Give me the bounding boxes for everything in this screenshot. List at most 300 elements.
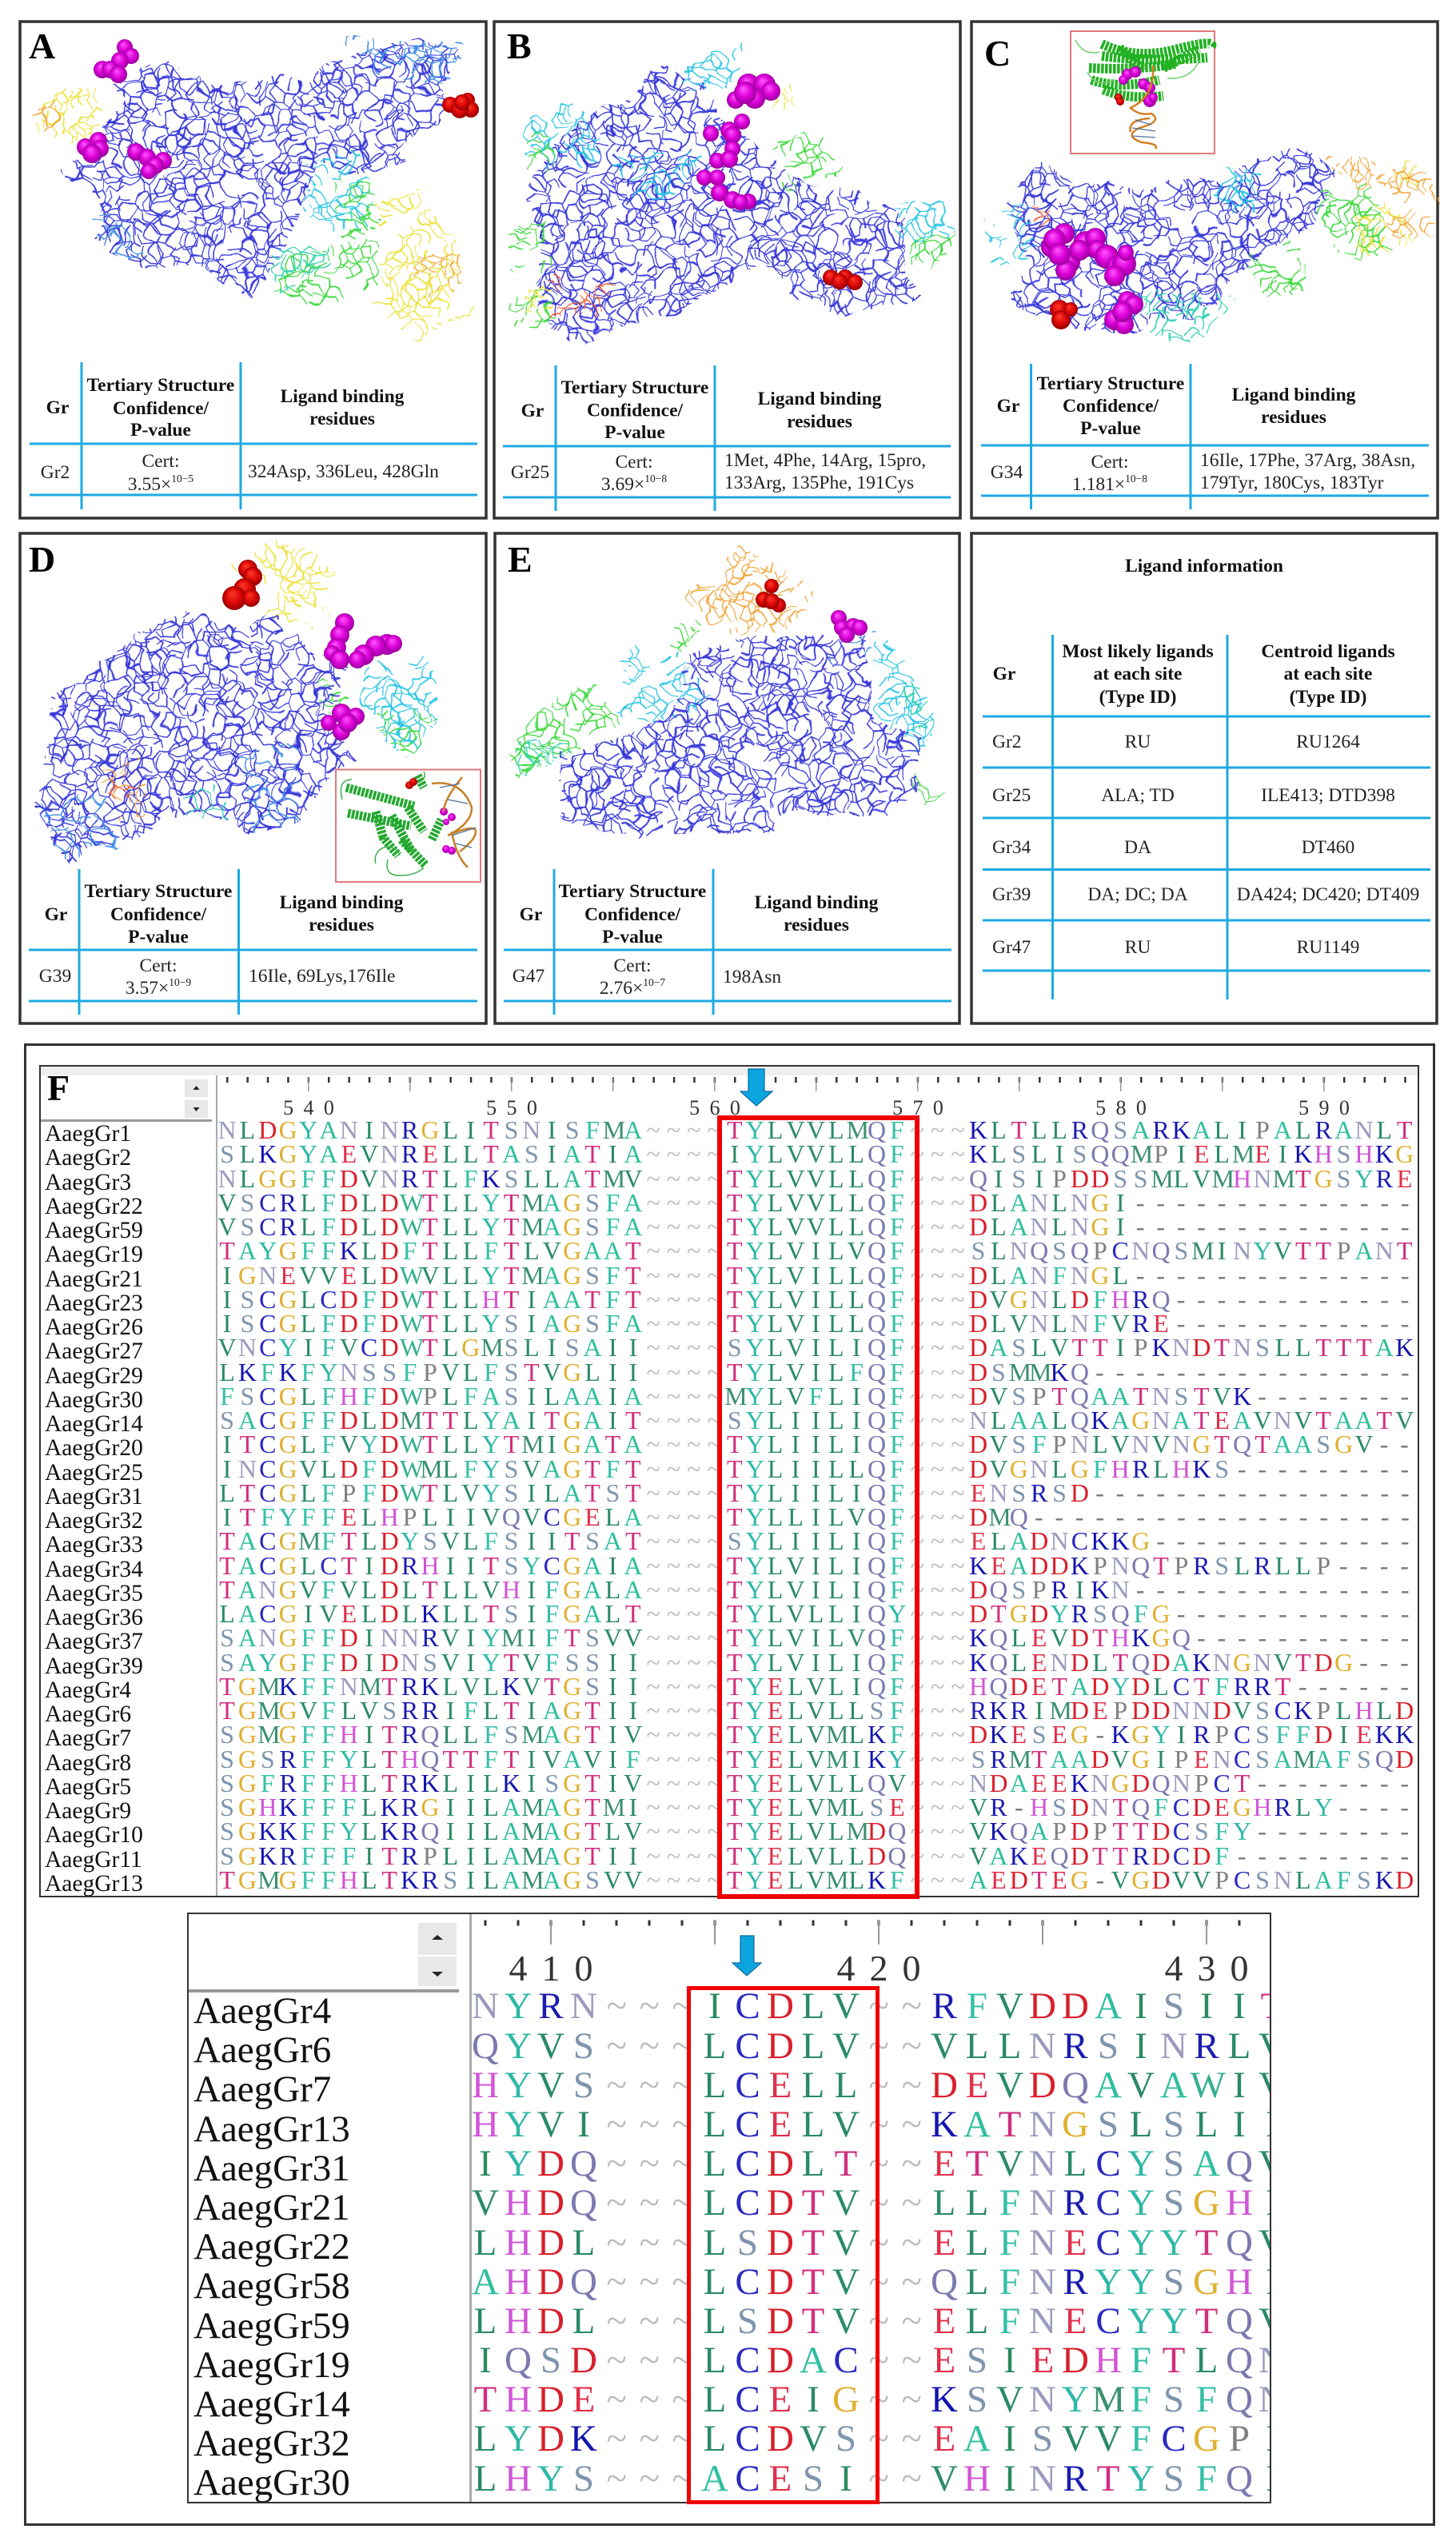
aligned residues: E: [341, 1260, 357, 1289]
aligned residues: ~~~: [911, 1430, 971, 1458]
aligned residues: L: [788, 1696, 804, 1725]
aligned residues: F: [321, 1865, 336, 1894]
aligned residues: D: [969, 1382, 987, 1410]
aligned residues: L: [301, 1382, 316, 1410]
aligned residues: S: [220, 1720, 234, 1749]
sequence names: AaegGr27: [45, 1338, 143, 1364]
aligned residues: I: [852, 1333, 860, 1362]
ligand information table: RU: [1125, 937, 1151, 958]
aligned residues: Q: [1131, 1551, 1150, 1580]
aligned residues: V: [1111, 1309, 1130, 1338]
ligand information table: DT460: [1302, 837, 1354, 858]
aligned residues: V: [1051, 1333, 1069, 1362]
aligned residues: C: [1095, 2182, 1121, 2224]
aligned residues: ~~~: [911, 1260, 971, 1289]
sequence names: AaegGr14: [193, 2383, 350, 2425]
aligned residues: N: [1029, 2104, 1056, 2145]
aligned residues: N: [1172, 1333, 1191, 1362]
ligand information table: Gr2: [992, 732, 1022, 752]
aligned residues: ~~~~: [646, 1696, 728, 1725]
aligned residues: L: [966, 2222, 988, 2264]
aligned residues: F: [321, 1672, 336, 1701]
aligned residues: V: [1354, 1430, 1373, 1458]
aligned residues: ~~~~: [646, 1285, 728, 1314]
aligned residues: Q: [868, 1454, 886, 1482]
aligned residues: G: [238, 1720, 257, 1749]
aligned residues: A: [624, 1502, 642, 1531]
aligned residues: T: [727, 1430, 743, 1458]
aligned residues: T: [544, 1672, 560, 1701]
aligned residues: A: [604, 1526, 622, 1555]
aligned residues: H: [1226, 2182, 1253, 2224]
red highlight box: motif 2: [687, 1986, 880, 2504]
aligned residues: H: [969, 1672, 987, 1701]
panel F label: F: [47, 1067, 70, 1108]
aligned residues: [472, 1987, 1270, 2499]
aligned residues: ~~~: [606, 2379, 705, 2420]
aligned residues: V: [537, 2064, 564, 2106]
aligned residues: L: [240, 1164, 255, 1193]
aligned residues: N: [1151, 1382, 1171, 1410]
aligned residues: D: [381, 1647, 399, 1676]
aligned residues: N: [1192, 1696, 1211, 1725]
aligned residues: K: [421, 1672, 439, 1701]
aligned residues: P: [1255, 1115, 1270, 1144]
aligned residues: G: [563, 1551, 581, 1580]
aligned residues: W: [400, 1285, 424, 1314]
aligned residues: C: [259, 1430, 276, 1458]
aligned residues: --------------: [1136, 1212, 1419, 1241]
aligned residues: E: [1194, 1745, 1210, 1773]
aligned residues: -: [1015, 1793, 1023, 1821]
panel B table: Confidence/: [587, 400, 684, 421]
panel C table: Cert:: [1091, 452, 1129, 473]
aligned residues: S: [606, 1478, 620, 1507]
aligned residues: V: [461, 1672, 480, 1701]
aligned residues: G: [1071, 1865, 1089, 1894]
panel A table: Gr2: [41, 462, 70, 483]
aligned residues: V: [807, 1188, 825, 1217]
aligned residues: I: [223, 1285, 231, 1314]
ligand information table: (Type ID): [1290, 687, 1366, 708]
aligned residues: T: [1112, 1647, 1128, 1676]
aligned residues: T: [422, 1309, 438, 1338]
panel D table: Ligand binding: [280, 892, 404, 913]
aligned residues: H: [381, 1502, 399, 1531]
aligned residues: ~~~: [606, 2104, 705, 2145]
aligned residues: I: [628, 1647, 637, 1676]
aligned residues: Q: [1091, 1115, 1109, 1144]
sequence names: AaegGr11: [45, 1847, 142, 1873]
aligned residues: V: [522, 1672, 541, 1701]
aligned residues: Q: [1226, 2458, 1253, 2499]
aligned residues: P: [1174, 1551, 1188, 1580]
aligned residues: M: [826, 1865, 849, 1894]
aligned residues: K: [482, 1164, 501, 1193]
aligned residues: D: [1030, 1551, 1048, 1580]
inset: ribbon structure D: [336, 769, 481, 882]
aligned residues: K: [279, 1358, 297, 1386]
aligned residues: I: [304, 1333, 313, 1362]
panel C table: G34: [991, 462, 1023, 483]
aligned residues: E: [1214, 1793, 1230, 1821]
aligned residues: L: [848, 1139, 864, 1168]
aligned residues: R: [401, 1115, 418, 1144]
aligned residues: D: [1151, 1841, 1171, 1869]
aligned residues: C: [1095, 2143, 1121, 2184]
aligned residues: T: [1112, 1817, 1128, 1845]
aligned residues: C: [735, 2261, 760, 2303]
aligned residues: I: [608, 1769, 617, 1797]
aligned residues: I: [852, 1478, 860, 1507]
aligned residues: I: [1116, 1188, 1125, 1217]
aligned residues: D: [1071, 1623, 1089, 1652]
aligned residues: T: [219, 1236, 235, 1265]
aligned residues: V: [299, 1260, 317, 1289]
aligned residues: D: [381, 1478, 399, 1507]
aligned residues: K: [381, 1817, 399, 1845]
aligned residues: M: [1211, 1164, 1235, 1193]
aligned residues: F: [890, 1382, 904, 1410]
aligned residues: ~~: [868, 2458, 935, 2499]
ruler and scroll buttons: 540: [283, 1096, 334, 1119]
aligned residues: W: [400, 1382, 424, 1410]
aligned residues: E: [769, 2379, 792, 2420]
aligned residues: D: [1192, 1841, 1211, 1869]
aligned residues: I: [628, 1793, 637, 1821]
aligned residues: A: [583, 1575, 602, 1604]
aligned residues: E: [768, 1745, 783, 1773]
aligned residues: L: [402, 1599, 417, 1628]
aligned residues: ~~~: [911, 1623, 971, 1652]
ligand information table: RU: [1125, 732, 1151, 752]
aligned residues: L: [828, 1382, 844, 1410]
aligned residues: ~~~: [606, 2300, 705, 2342]
aligned residues: F: [890, 1358, 904, 1386]
aligned residues: A: [1160, 2064, 1187, 2106]
aligned residues: F: [484, 1236, 498, 1265]
aligned residues: V: [360, 1696, 378, 1725]
magenta ligand spheres: [696, 74, 780, 210]
aligned residues: I: [466, 1623, 475, 1652]
aligned residues: N: [401, 1647, 419, 1676]
aligned residues: F: [890, 1502, 904, 1531]
aligned residues: Y: [401, 1526, 419, 1555]
aligned residues: V: [807, 1164, 825, 1193]
aligned residues: L: [463, 1720, 478, 1749]
aligned residues: G: [1111, 1769, 1130, 1797]
aligned residues: S: [1093, 1599, 1107, 1628]
aligned residues: ~~~: [911, 1865, 971, 1894]
aligned residues: A: [563, 1478, 581, 1507]
aligned residues: S: [1134, 1164, 1148, 1193]
aligned residues: M: [826, 1720, 849, 1749]
aligned residues: I: [812, 1502, 820, 1531]
aligned residues: T: [1011, 1115, 1027, 1144]
aligned residues: D: [767, 2222, 794, 2264]
aligned residues: L: [966, 2182, 988, 2224]
aligned residues: L: [828, 1599, 844, 1628]
aligned residues: L: [991, 1139, 1007, 1168]
aligned residues: C: [259, 1285, 276, 1314]
aligned residues: E: [769, 2458, 792, 2499]
aligned residues: L: [828, 1260, 844, 1289]
aligned residues: I: [223, 1430, 231, 1458]
aligned residues: T: [219, 1575, 235, 1604]
aligned residues: Y: [1111, 1672, 1130, 1701]
aligned residues: L: [341, 1696, 357, 1725]
aligned residues: V: [996, 2064, 1023, 2106]
aligned residues: R: [401, 1817, 418, 1845]
sequence names: AaegGr36: [45, 1605, 143, 1630]
panel B table: residues: [787, 411, 852, 432]
aligned residues: E: [768, 1672, 783, 1701]
aligned residues: D: [258, 1115, 277, 1144]
aligned residues: D: [767, 2182, 794, 2224]
aligned residues: Y: [746, 1406, 764, 1434]
ligand information table: DA; DC; DA: [1087, 884, 1188, 905]
panel B table: 1Met, 4Phe, 14Arg, 15pro,: [724, 450, 926, 471]
aligned residues: I: [608, 1358, 617, 1386]
aligned residues: L: [828, 1454, 844, 1482]
aligned residues: L: [999, 2025, 1021, 2067]
panel A table: Gr: [46, 397, 69, 418]
aligned residues: P: [1229, 2418, 1250, 2459]
aligned residues: ~~: [868, 2182, 935, 2224]
panel C table: Confidence/: [1063, 396, 1159, 417]
panel D table: P-value: [128, 927, 189, 947]
aligned residues: T: [504, 1236, 519, 1265]
aligned residues: D: [340, 1164, 358, 1193]
aligned residues: Y: [1062, 2379, 1089, 2420]
aligned residues: L: [768, 1115, 783, 1144]
aligned residues: Y: [505, 2418, 532, 2459]
aligned residues: V: [807, 1865, 825, 1894]
aligned residues: F: [890, 1551, 904, 1580]
aligned residues: L: [828, 1623, 844, 1652]
aligned residues: D: [767, 2340, 794, 2381]
aligned residues: F: [1154, 1793, 1168, 1821]
aligned residues: E: [1255, 1139, 1271, 1168]
aligned residues: W: [400, 1309, 424, 1338]
aligned residues: D: [1071, 1841, 1089, 1869]
aligned residues: T: [219, 1526, 235, 1555]
aligned residues: D: [1091, 1745, 1109, 1773]
aligned residues: --------: [1258, 1382, 1419, 1410]
aligned residues: E: [933, 2143, 955, 2184]
aligned residues: I: [223, 1454, 231, 1482]
sequence names: AaegGr35: [45, 1581, 143, 1606]
aligned residues: I: [792, 1430, 800, 1458]
aligned residues: A: [543, 1696, 561, 1725]
aligned residues: T: [727, 1769, 743, 1797]
aligned residues: A: [1274, 1430, 1292, 1458]
aligned residues: N: [1172, 1430, 1191, 1458]
aligned residues: Y: [482, 1647, 501, 1676]
aligned residues: T: [381, 1865, 397, 1894]
aligned residues: D: [1151, 1696, 1171, 1725]
aligned residues: I: [466, 1115, 475, 1144]
aligned residues: ~~~~: [646, 1647, 728, 1676]
aligned residues: L: [991, 1406, 1007, 1434]
aligned residues: E: [971, 1478, 986, 1507]
aligned residues: T: [1315, 1333, 1331, 1362]
aligned residues: -: [1095, 1865, 1104, 1894]
aligned residues: G: [563, 1841, 581, 1869]
aligned residues: K: [238, 1358, 257, 1386]
sequence names: AaegGr26: [45, 1314, 143, 1340]
aligned residues: C: [735, 2458, 760, 2499]
aligned residues: Y: [1160, 2222, 1187, 2264]
aligned residues: M: [1293, 1745, 1316, 1773]
aligned residues: N: [1030, 1188, 1048, 1217]
aligned residues: S: [1011, 1382, 1026, 1410]
aligned residues: E: [1064, 2300, 1087, 2342]
aligned residues: Q: [868, 1309, 886, 1338]
aligned residues: C: [259, 1382, 276, 1410]
aligned residues: L: [768, 1188, 783, 1217]
aligned residues: F: [890, 1430, 904, 1458]
aligned residues: S: [1011, 1575, 1026, 1604]
aligned residues: D: [1091, 1164, 1109, 1193]
aligned residues: Q: [1010, 1502, 1028, 1531]
aligned residues: F: [1337, 1745, 1350, 1773]
aligned residues: R: [401, 1672, 418, 1701]
aligned residues: C: [1234, 1745, 1251, 1773]
aligned residues: V: [786, 1382, 805, 1410]
aligned residues: L: [474, 2222, 497, 2264]
aligned residues: L: [361, 1817, 377, 1845]
panel E table: Cert:: [614, 955, 651, 976]
aligned residues: I: [365, 1551, 373, 1580]
aligned residues: T: [422, 1333, 438, 1362]
aligned residues: A: [238, 1623, 257, 1652]
aligned residues: R: [1234, 1672, 1251, 1701]
aligned residues: M: [257, 1720, 281, 1749]
panel D table: Cert:: [139, 955, 178, 976]
aligned residues: V: [786, 1164, 805, 1193]
aligned residues: D: [1091, 1672, 1109, 1701]
aligned residues: ~~~~: [646, 1430, 728, 1458]
aligned residues: L: [828, 1430, 844, 1458]
aligned residues: S: [220, 1139, 234, 1168]
aligned residues: ~~~: [911, 1406, 971, 1434]
aligned residues: V: [832, 2300, 860, 2342]
aligned residues: L: [788, 1745, 804, 1773]
aligned residues: V: [543, 1358, 561, 1386]
aligned residues: F: [362, 1454, 377, 1482]
aligned residues: V: [421, 1260, 439, 1289]
aligned residues: S: [1174, 1382, 1188, 1410]
aligned residues: P: [1316, 1696, 1330, 1725]
aligned residues: L: [402, 1575, 417, 1604]
aligned residues: F: [890, 1139, 904, 1168]
aligned residues: Q: [989, 1672, 1007, 1701]
aligned residues: A: [624, 1115, 642, 1144]
aligned residues: V: [1151, 1430, 1171, 1458]
aligned residues: --------------: [1136, 1575, 1419, 1604]
sequence names: AaegGr8: [45, 1749, 131, 1775]
aligned residues: Q: [868, 1260, 886, 1289]
aligned residues: Q: [505, 2340, 532, 2381]
aligned residues: S: [728, 1406, 742, 1434]
aligned residues: V: [832, 2261, 860, 2303]
aligned residues: Q: [931, 2261, 958, 2303]
aligned residues: S: [1052, 1478, 1067, 1507]
aligned residues: E: [933, 2222, 955, 2264]
aligned residues: Q: [868, 1164, 886, 1193]
aligned residues: L: [848, 1720, 864, 1749]
aligned residues: S: [585, 1526, 600, 1555]
aligned residues: T: [727, 1551, 743, 1580]
aligned residues: T: [422, 1236, 438, 1265]
panel C wireframe structure: [982, 146, 1438, 343]
aligned residues: I: [852, 1406, 860, 1434]
aligned residues: F: [464, 1696, 478, 1725]
aligned residues: ~~~: [911, 1841, 971, 1869]
aligned residues: C: [320, 1551, 337, 1580]
aligned residues: Y: [746, 1430, 764, 1458]
aligned residues: S: [585, 1260, 600, 1289]
aligned residues: S: [220, 1647, 234, 1676]
aligned residues: ~~~: [911, 1526, 971, 1555]
aligned residues: Q: [1226, 2300, 1253, 2342]
aligned residues: K: [931, 2104, 958, 2145]
aligned residues: D: [340, 1406, 358, 1434]
aligned residues: ~~~: [911, 1575, 971, 1604]
ligand information table: Gr: [993, 664, 1015, 684]
sequence names: AaegGr20: [45, 1435, 143, 1461]
aligned residues: Q: [1172, 1623, 1191, 1652]
aligned residues: I: [365, 1841, 373, 1869]
aligned residues: Y: [888, 1599, 906, 1628]
aligned residues: I: [812, 1478, 820, 1507]
aligned residues: T: [483, 1599, 499, 1628]
aligned residues: P: [423, 1841, 437, 1869]
aligned residues: I: [852, 1672, 860, 1701]
panel E table: Gr: [520, 904, 542, 925]
aligned residues: ~~~: [606, 2222, 705, 2264]
aligned residues: V: [807, 1720, 825, 1749]
aligned residues: Y: [1253, 1236, 1272, 1265]
aligned residues: R: [401, 1164, 418, 1193]
aligned residues: T: [991, 1599, 1007, 1628]
aligned residues: Y: [746, 1865, 764, 1894]
aligned residues: T: [727, 1575, 743, 1604]
aligned residues: T: [727, 1647, 743, 1676]
aligned residues: I: [852, 1551, 860, 1580]
aligned residues: G: [1334, 1430, 1353, 1458]
aligned residues: K: [1375, 1865, 1394, 1894]
aligned residues: Q: [1226, 2340, 1253, 2381]
aligned residues: I: [1135, 2025, 1147, 2067]
panel D wireframe structure: [34, 540, 443, 863]
aligned residues: F: [1134, 1599, 1148, 1628]
aligned residues: G: [563, 1502, 581, 1531]
aligned residues: I: [608, 1406, 617, 1434]
aligned residues: Y: [505, 2064, 532, 2106]
aligned residues: Y: [746, 1696, 764, 1725]
aligned residues: Y: [1127, 2458, 1155, 2499]
aligned residues: I: [852, 1745, 860, 1773]
aligned residues: L: [483, 1793, 499, 1821]
aligned residues: V: [996, 2379, 1023, 2420]
aligned residues: L: [828, 1236, 844, 1265]
aligned residues: L: [463, 1575, 478, 1604]
aligned residues: R: [1132, 1454, 1149, 1482]
aligned residues: A: [604, 1236, 622, 1265]
aligned residues: L: [361, 1745, 377, 1773]
